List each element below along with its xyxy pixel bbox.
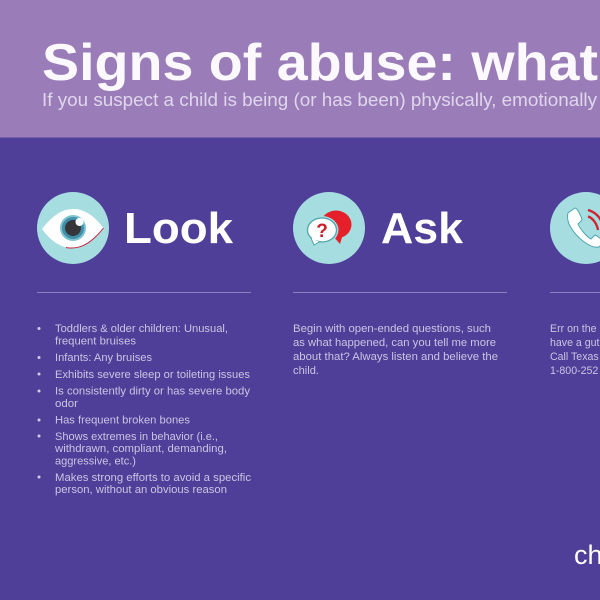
bullet list: look signs: Makes strong efforts to avoid a specific: [55, 472, 252, 484]
bullet list: look signs: aggressive, etc.): [55, 456, 136, 468]
icon: phone: [550, 192, 600, 264]
heading: Look: Look: [124, 204, 234, 253]
text block: call advice: have a gut: [550, 337, 600, 349]
panel: header band: [0, 0, 600, 138]
text block: call advice: 1-800-252: [550, 365, 598, 377]
text block: call advice: Call Texas: [550, 351, 599, 363]
bullet list: look signs: Shows extremes in behavior (i.e.,: [55, 431, 218, 443]
panel: call column: [550, 192, 600, 377]
bullet list: look signs: Has frequent broken bones: [55, 414, 190, 426]
heading: Ask: Ask: [381, 204, 464, 253]
bullet list: look signs: Toddlers & older children: Unusual,: [55, 323, 228, 335]
bullet list: look signs: frequent bruises: [55, 336, 136, 348]
text block: call advice: Err on the: [550, 323, 597, 335]
panel: ask column: [293, 192, 507, 377]
panel: look column: [37, 192, 252, 496]
text block: ask advice: child.: [293, 365, 319, 377]
title: Signs of abuse: what: [42, 34, 598, 92]
bullet list: look signs: Is consistently dirty or has severe body: [55, 386, 251, 398]
text block: ask advice: as what happened, can you tell me more: [293, 337, 496, 349]
bullet list: look signs: [38, 323, 252, 496]
subtitle: If you suspect a child is being (or has been) physically, emotionally: [42, 90, 597, 110]
bullet list: look signs: person, without an obvious reason: [55, 484, 227, 496]
panel: main background: [0, 138, 600, 600]
bullet list: look signs: odor: [55, 398, 79, 410]
icon: speech bubbles: [293, 192, 365, 264]
text block: ask advice: Begin with open-ended questions, such: [293, 323, 491, 335]
bullet list: look signs: withdrawn, compliant, demanding,: [54, 443, 227, 455]
text block: ask advice: [293, 323, 498, 377]
icon: speech bubbles: ?: [316, 221, 328, 242]
bullet list: look signs: Infants: Any bruises: [55, 352, 152, 364]
bullet list: look signs: Exhibits severe sleep or toileting issues: [55, 369, 250, 381]
icon: eye: [37, 192, 109, 264]
text block: ask advice: about that? Always listen and believe the: [293, 351, 498, 363]
text block: call advice: [550, 323, 600, 377]
